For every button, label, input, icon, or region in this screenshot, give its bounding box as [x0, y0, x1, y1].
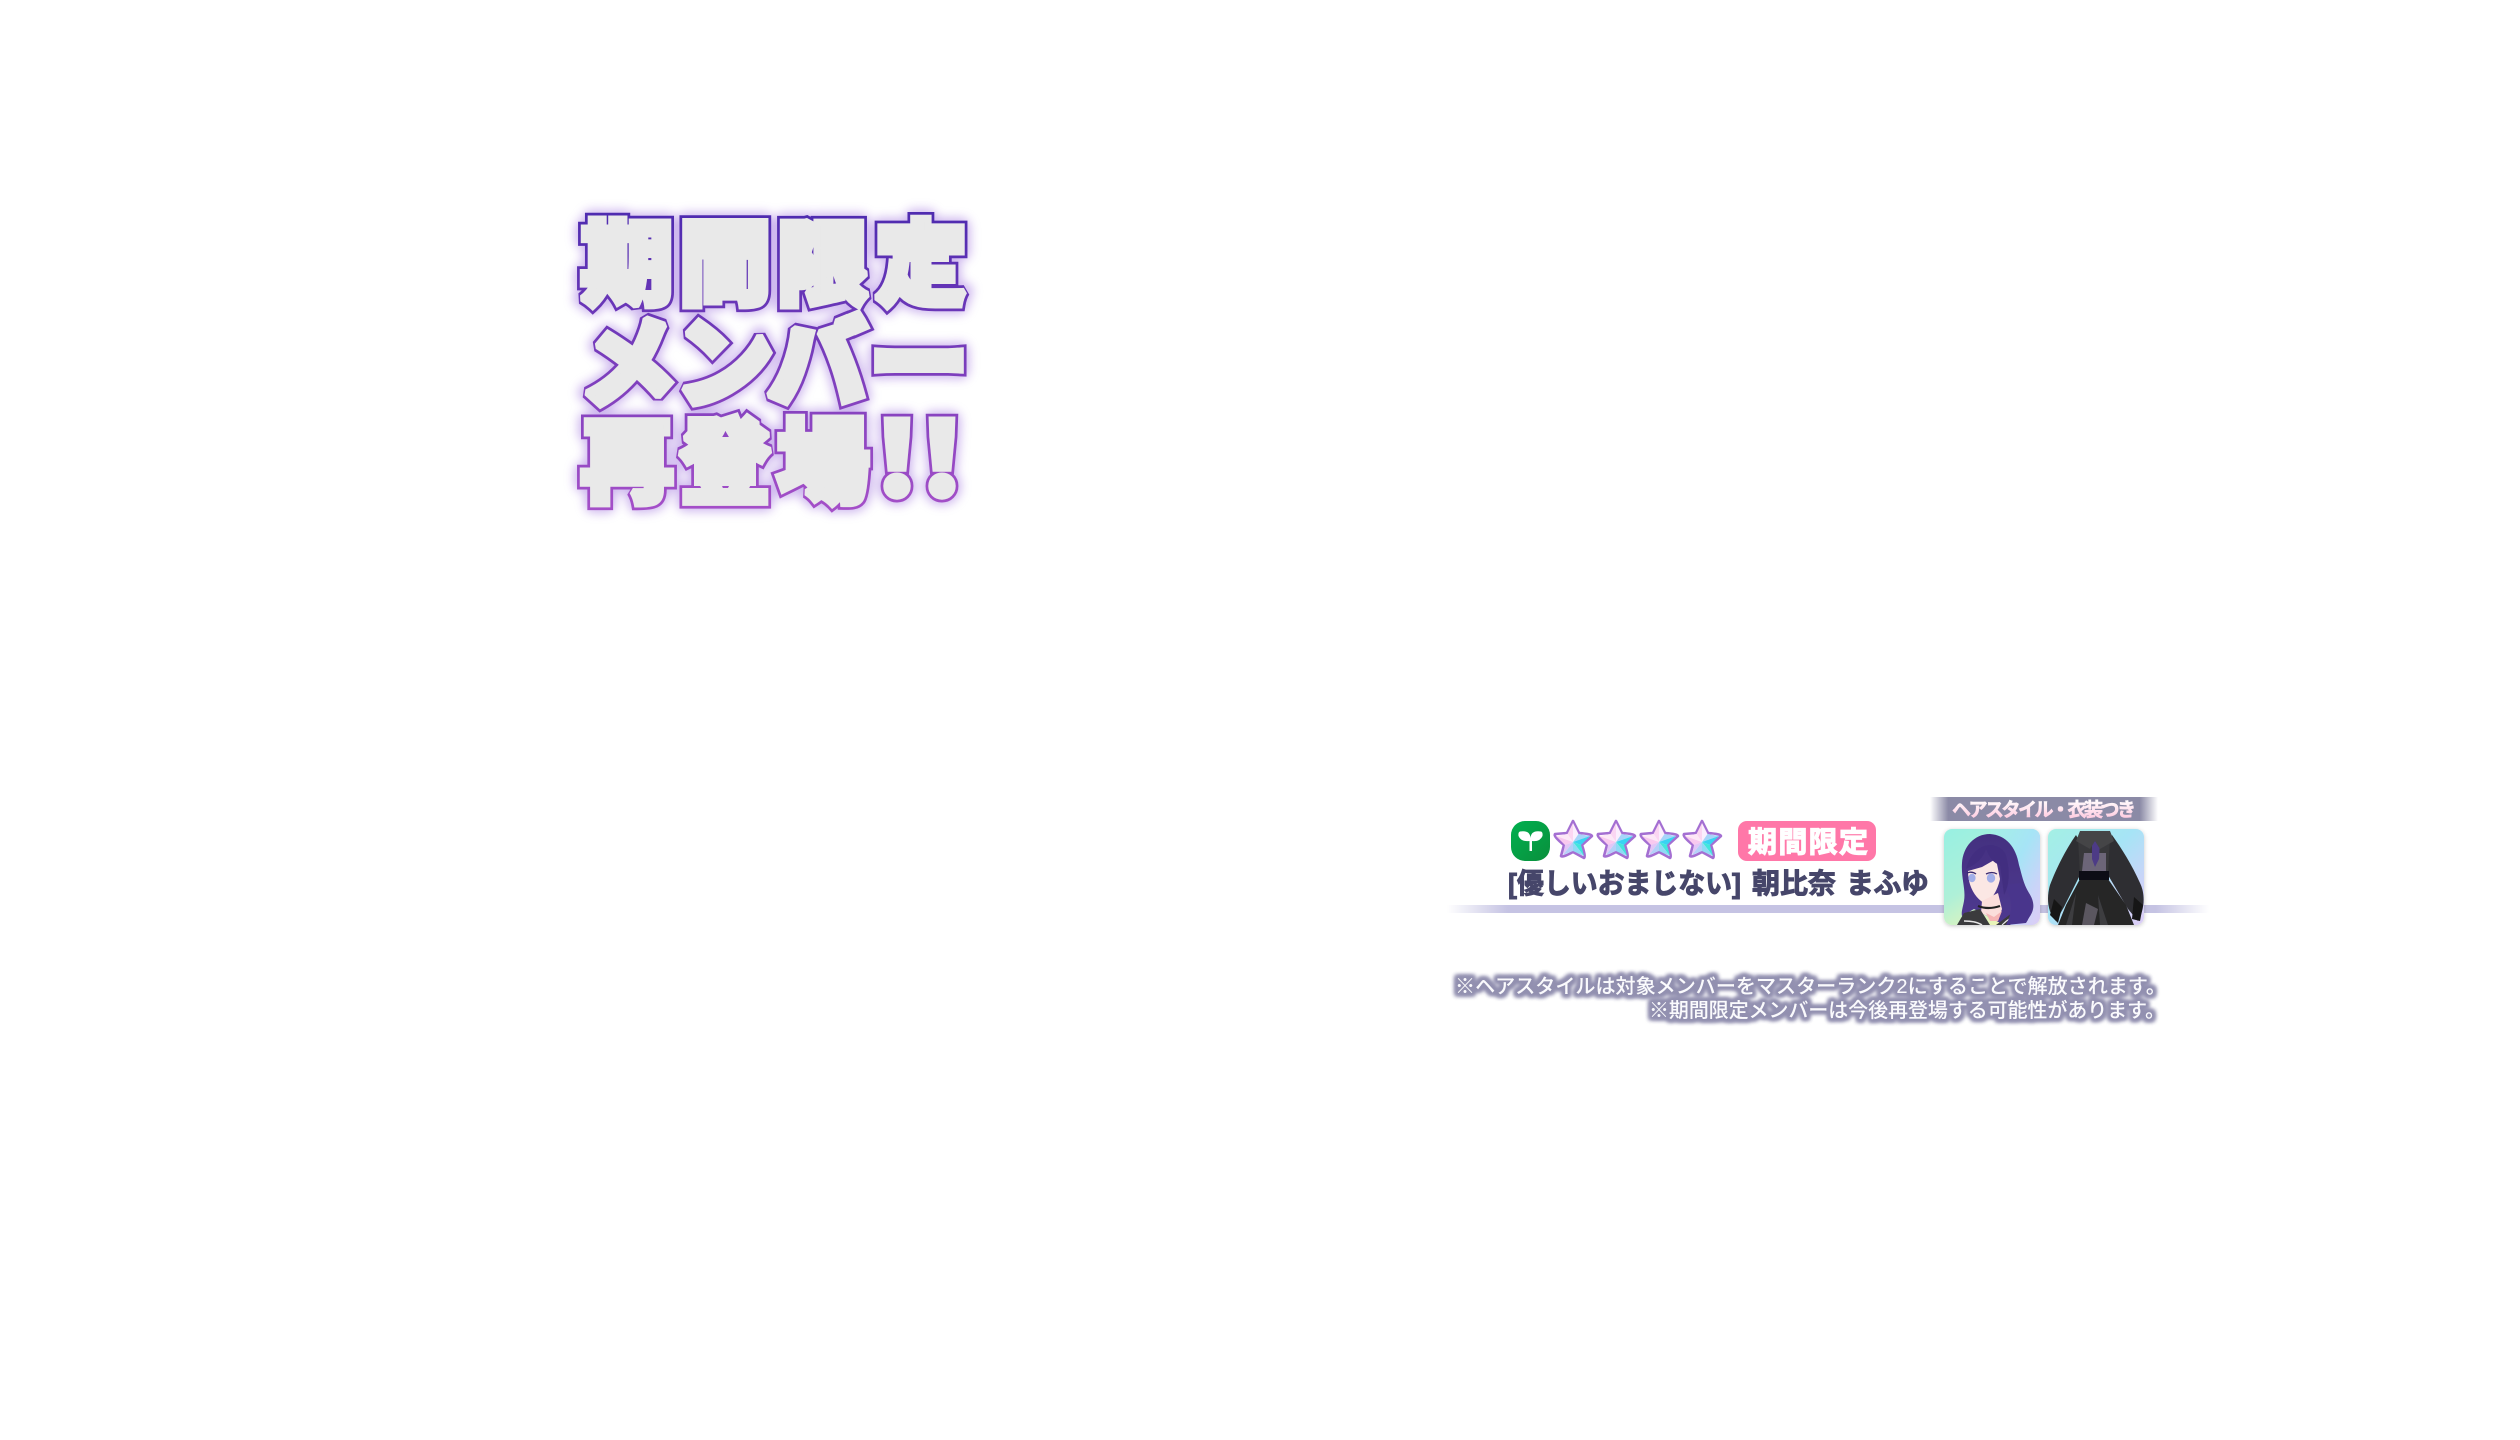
- member name: 朝比奈: [1752, 868, 1836, 899]
- divider bar under member name: [1447, 905, 2209, 913]
- member name: まふゆ: [1846, 868, 1929, 899]
- thumbnail: hairstyle portrait: [1944, 829, 2040, 925]
- member card info: [1508, 821, 1929, 899]
- title: 期間限定メンバー再登場!!: 再登場: [581, 413, 869, 515]
- icon: four rarity stars: [1555, 821, 1721, 858]
- title: 期間限定メンバー再登場!!: 再登場: [581, 413, 869, 515]
- title: 期間限定メンバー再登場!!: 期間限定: [581, 215, 967, 317]
- footnotes: ※ヘアスタイルは対象メンバーをマスターランク2にすることで解放されます。: [1455, 975, 2166, 998]
- title: 期間限定メンバー再登場!!: メンバー: [578, 309, 969, 421]
- thumbnail: black costume: [2048, 829, 2144, 925]
- member name: [1508, 868, 1929, 899]
- heading strip: hairstyle and costume: ヘアスタイル・衣装つき: [1952, 799, 2136, 821]
- badge: limited time: [1738, 821, 1876, 861]
- title: 期間限定メンバー再登場!!: 期間限定: [581, 215, 967, 317]
- title: 期間限定メンバー再登場!!: ！！: [847, 405, 992, 517]
- title: 期間限定メンバー再登場!!: 再登場: [581, 413, 869, 515]
- panel: hairstyle and costume rewards: [1930, 797, 2158, 925]
- title: 期間限定メンバー再登場!!: メンバー: [578, 309, 969, 421]
- title: 期間限定メンバー再登場!!: ！！: [847, 405, 992, 517]
- title: 期間限定メンバー再登場!!: [578, 215, 992, 517]
- title: 期間限定メンバー再登場!!: ！！: [847, 405, 992, 517]
- icon: green sprout attribute: [1511, 821, 1550, 861]
- badge: limited time: 期間限定: [1748, 826, 1868, 859]
- title: 期間限定メンバー再登場!!: メンバー: [578, 309, 969, 421]
- title: 期間限定メンバー再登場!!: 期間限定: [581, 215, 967, 317]
- footnotes: [1455, 975, 2166, 1022]
- member name: [優しいおまじない]: [1508, 868, 1741, 899]
- footnotes: ※期間限定メンバーは今後再登場する可能性があります。: [1649, 999, 2165, 1022]
